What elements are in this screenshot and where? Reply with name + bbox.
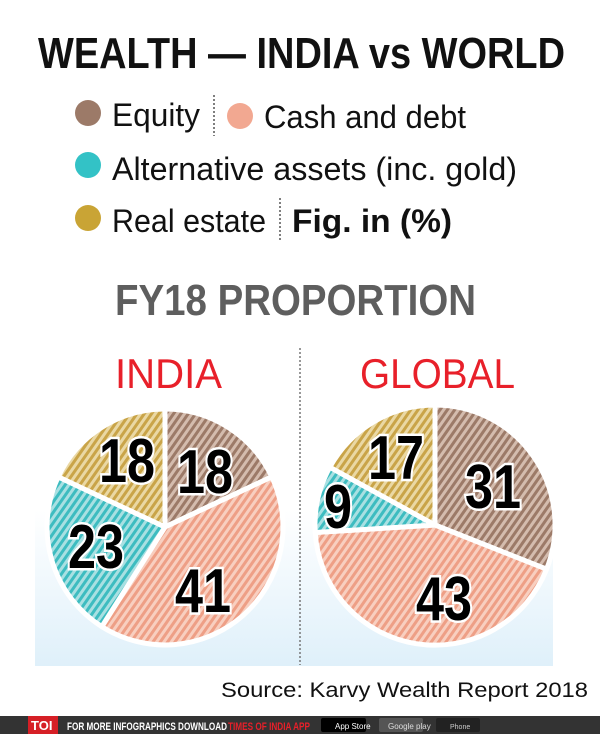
footer bar: TOI	[31, 718, 52, 733]
global values: 17	[368, 424, 424, 493]
legend: cash and debt: Cash and debt	[264, 99, 466, 135]
global values: 31	[465, 453, 521, 522]
global values: 43	[416, 565, 472, 634]
global values	[324, 424, 521, 634]
background panel	[35, 510, 553, 666]
footer bar: Google play	[388, 722, 431, 731]
source: Source: Karvy Wealth Report 2018	[221, 679, 588, 702]
legend note: figures: Fig. in (%)	[292, 203, 452, 239]
india values: 23	[68, 513, 124, 582]
footer bar: App Store	[335, 722, 371, 731]
pie chart: india	[47, 409, 283, 645]
footer bar: FOR MORE INFOGRAPHICS DOWNLOAD	[67, 721, 227, 733]
global values: 9	[324, 473, 352, 542]
india values	[68, 427, 233, 626]
legend: equity: Equity	[112, 97, 200, 133]
footer bar: Phone	[450, 724, 470, 731]
subtitle: FY18 PROPORTION	[115, 276, 476, 325]
legend	[75, 95, 517, 240]
india values: 18	[177, 438, 233, 507]
india values: 18	[99, 427, 155, 496]
pie chart: global	[315, 405, 555, 645]
heading: global: GLOBAL	[360, 350, 515, 397]
india values: 41	[175, 557, 231, 626]
footer bar: TIMES OF INDIA APP	[228, 721, 310, 733]
legend: alternative assets: Alternative assets (inc. gold)	[112, 151, 517, 187]
heading: india: INDIA	[115, 350, 222, 397]
footer bar	[0, 716, 600, 734]
legend: equity	[75, 97, 200, 133]
legend: real estate: Real estate	[112, 203, 266, 239]
